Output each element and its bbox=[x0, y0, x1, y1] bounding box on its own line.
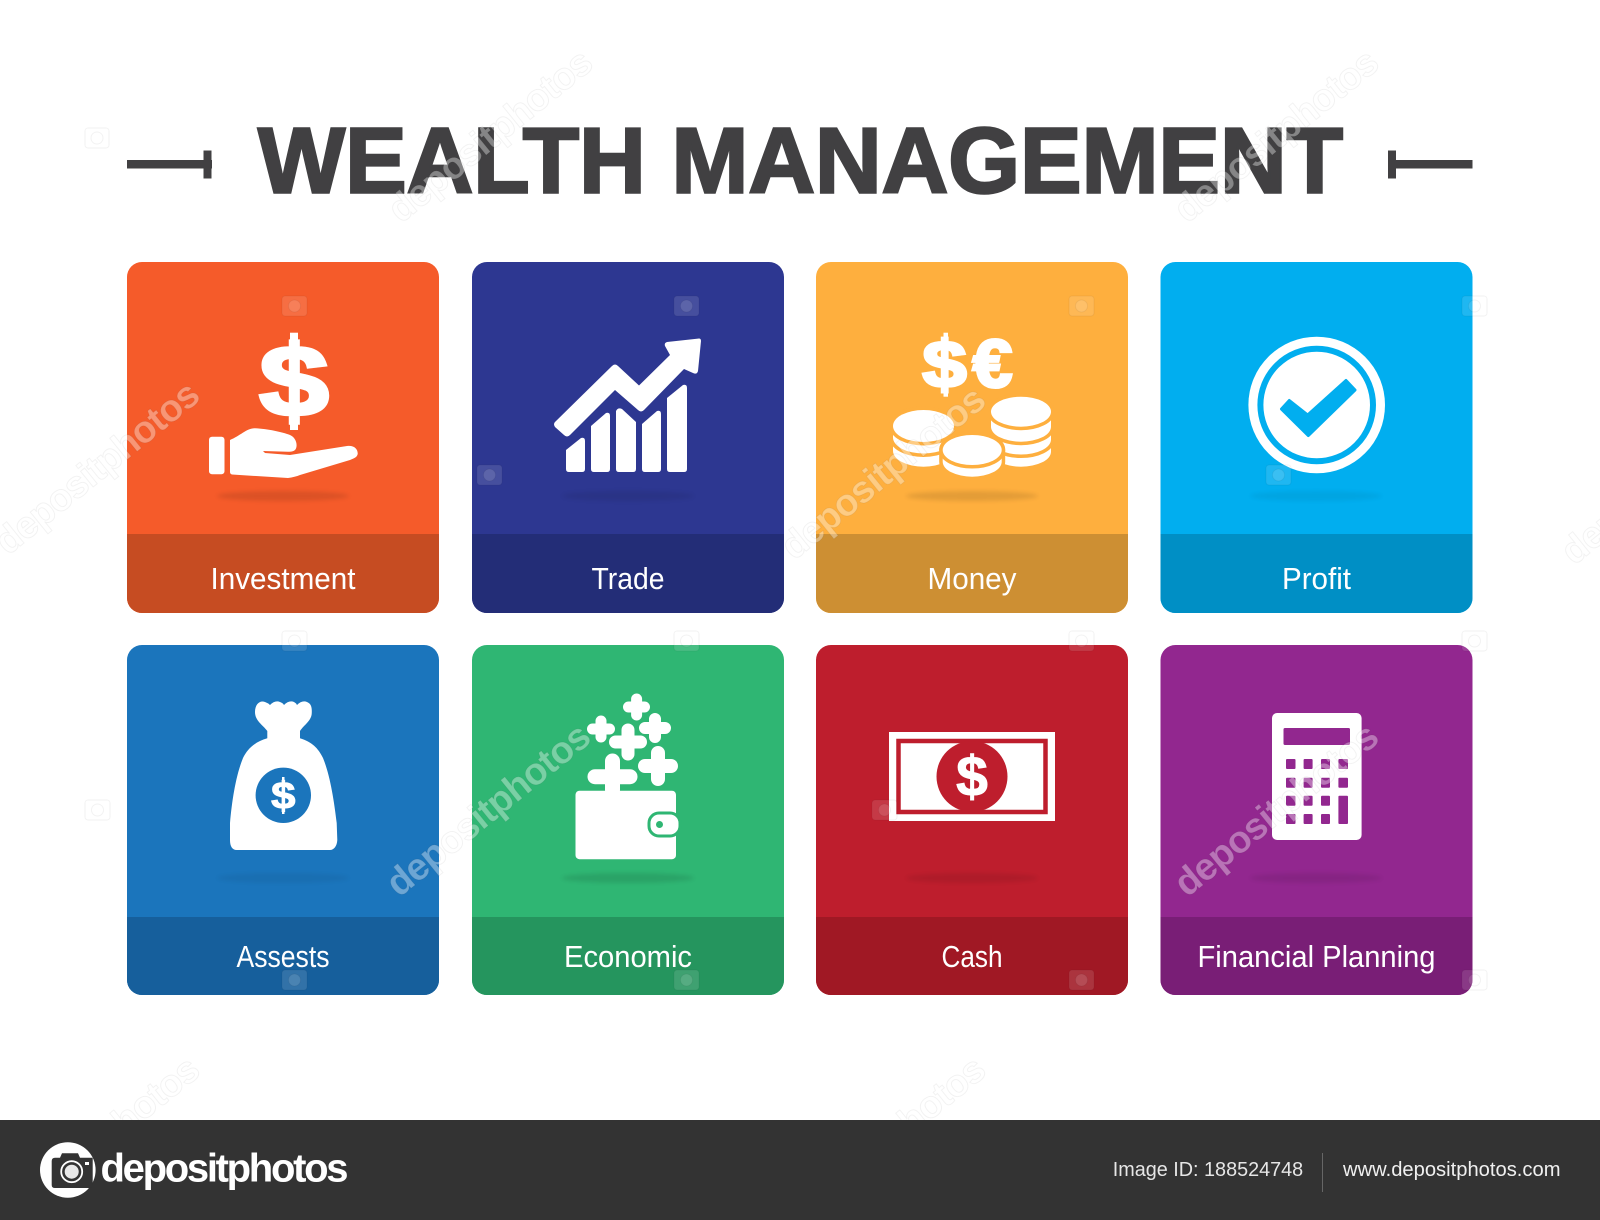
icon: dollar euro and coin stacks: € bbox=[973, 326, 1012, 402]
icon: bank note: $ bbox=[956, 745, 988, 809]
watermark: depositphotos text overlay: depositphotos bbox=[1166, 715, 1387, 905]
left title bracket bbox=[127, 150, 212, 178]
icon: dollar euro and coin stacks: $ bbox=[922, 328, 967, 401]
label: Economic: Economic bbox=[564, 939, 692, 974]
panel: Profit bbox=[1160, 262, 1472, 613]
label: Assests: Assests bbox=[236, 939, 330, 974]
label: Money: Money bbox=[928, 561, 1017, 596]
logo wordmark: depositphotos bbox=[100, 1147, 348, 1191]
icon: check mark badge bbox=[1248, 337, 1385, 473]
label: Cash: Cash bbox=[942, 939, 1002, 974]
title: WEALTH MANAGEMENT bbox=[258, 108, 1343, 212]
icon: hand holding dollar bbox=[209, 325, 358, 478]
label: Financial Planning: Financial Planning bbox=[1198, 939, 1436, 974]
panel: Money bbox=[816, 262, 1128, 613]
icon: camera logo bbox=[40, 1142, 96, 1198]
footer bar bbox=[0, 1120, 1600, 1220]
watermark: depositphotos text overlay: depositphotos bbox=[378, 715, 599, 905]
panel: Economic bbox=[472, 645, 784, 995]
label: Trade: Trade bbox=[592, 561, 664, 596]
watermark: depositphotos text overlay: depositphotos bbox=[1166, 41, 1387, 231]
icon: bank note bbox=[889, 732, 1055, 821]
label: Investment: Investment bbox=[210, 561, 356, 596]
icon: rising bar chart with arrow bbox=[554, 338, 701, 472]
panel: Investment bbox=[127, 262, 439, 613]
right title bracket bbox=[1388, 150, 1472, 178]
image id: Image ID: 188524748 bbox=[1113, 1159, 1303, 1181]
panel: Trade bbox=[472, 262, 784, 613]
icon: wallet with plus signs bbox=[576, 699, 680, 859]
website url: www.depositphotos.com bbox=[1342, 1159, 1560, 1181]
panel: Cash bbox=[816, 645, 1128, 995]
icon: calculator bbox=[1272, 713, 1362, 840]
label: Profit: Profit bbox=[1282, 561, 1351, 596]
watermark: small camera marks bbox=[85, 128, 1487, 990]
icon: hand holding dollar: $ bbox=[259, 325, 329, 437]
icon: money bag: $ bbox=[271, 774, 296, 817]
panel: Assests bbox=[127, 645, 439, 995]
watermark: depositphotos text overlay: depositphotos bbox=[380, 41, 601, 231]
watermark: depositphotos text overlay: depositphotos bbox=[773, 378, 994, 568]
panel: Financial Planning bbox=[1160, 645, 1472, 995]
icon: dollar euro and coin stacks bbox=[893, 326, 1051, 477]
icon: money bag bbox=[230, 701, 337, 850]
